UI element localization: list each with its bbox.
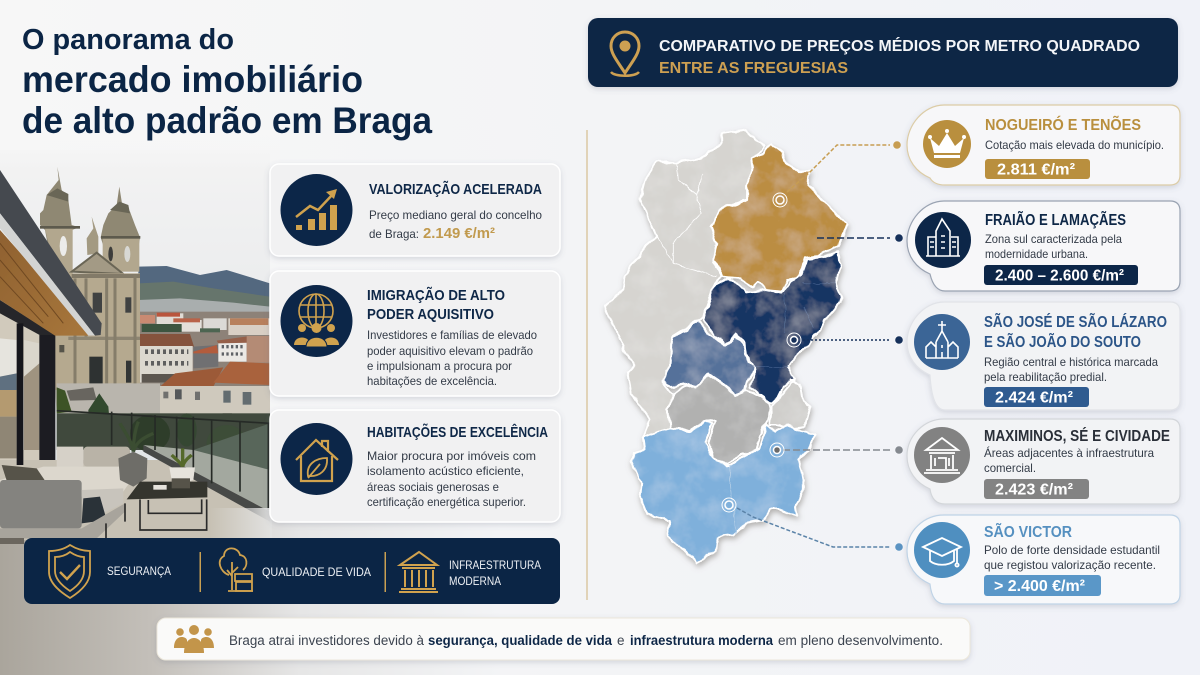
card: Nogueiró e Tenões: Cotação mais elevada do município. bbox=[985, 138, 1164, 152]
icon: shield bbox=[49, 545, 90, 598]
panel: imigração de alto poder aquisitivo: PODER AQUISITIVO bbox=[367, 306, 494, 323]
card: São José de São Lázaro e São João do Souto bbox=[895, 302, 1180, 410]
leader: Maximinos bbox=[783, 449, 890, 451]
leader: Nogueiró bbox=[787, 145, 890, 192]
card: Maximinos, Sé e Cividade: comercial. bbox=[984, 461, 1036, 475]
region: São José de São Lázaro bbox=[703, 252, 842, 403]
icon: crown bbox=[923, 120, 971, 168]
square bbox=[55, 385, 160, 413]
map markers bbox=[722, 193, 801, 512]
region: west parishes bbox=[605, 130, 765, 437]
towers bbox=[40, 167, 79, 267]
photo: Braga cathedral and terrace bbox=[0, 130, 280, 544]
icon: globe and people bbox=[280, 285, 352, 357]
card: São José de São Lázaro e São João do Souto: pela reabilitação predial. bbox=[984, 370, 1107, 384]
card: São José de São Lázaro e São João do Souto: E SÃO JOÃO DO SOUTO bbox=[984, 333, 1141, 351]
town bbox=[140, 315, 155, 323]
card: Fraião e Lamações: FRAIÃO E LAMAÇÃES bbox=[985, 211, 1126, 229]
card: São Victor bbox=[895, 515, 1180, 604]
region: Nogueiró e Tenões bbox=[711, 143, 848, 292]
roof bbox=[0, 230, 93, 336]
region: São Victor bbox=[632, 422, 815, 563]
card: São José de São Lázaro e São João do Souto: Região central e histórica marcada bbox=[984, 355, 1158, 369]
map of Braga parishes bbox=[605, 130, 848, 563]
icon: civic building bbox=[914, 427, 970, 483]
panel: benefits bar: INFRAESTRUTURA bbox=[449, 560, 541, 572]
panel: valorização acelerada bbox=[270, 164, 560, 256]
panel: habitações de excelência: certificação energética superior. bbox=[367, 495, 526, 509]
icon: graduation cap bbox=[914, 522, 970, 578]
glass wall bbox=[0, 313, 55, 460]
card: São Victor: > 2.400 €/m² bbox=[994, 578, 1085, 595]
leader: São José bbox=[803, 339, 890, 341]
panel: benefits bar: MODERNA bbox=[449, 576, 501, 588]
card: São Victor: SÃO VICTOR bbox=[984, 523, 1072, 541]
panel: habitações de excelência: isolamento acústico eficiente, bbox=[367, 464, 524, 478]
panel: imigração de alto poder aquisitivo: Investidores e famílias de elevado bbox=[367, 328, 537, 342]
icon: tree and bench bbox=[220, 548, 253, 591]
region: east small parish bbox=[770, 380, 810, 428]
panel: valorização acelerada: Preço mediano geral do concelho bbox=[369, 208, 542, 222]
panel: map heading bbox=[588, 18, 1178, 87]
card: Fraião e Lamações bbox=[895, 201, 1180, 291]
title: O panorama do bbox=[22, 24, 234, 56]
panel: valorização acelerada: de Braga: bbox=[369, 227, 419, 241]
card: São José de São Lázaro e São João do Souto: SÃO JOSÉ DE SÃO LÁZARO bbox=[984, 313, 1167, 331]
icon: temple bbox=[399, 552, 438, 592]
panel: map heading: COMPARATIVO DE PREÇOS MÉDIOS POR METRO QUADRADO bbox=[659, 36, 1140, 55]
panel: imigração de alto poder aquisitivo: e impulsionam a procura por bbox=[367, 359, 512, 373]
panel: imigração de alto poder aquisitivo: IMIGRAÇÃO DE ALTO bbox=[367, 286, 505, 304]
floor fading to the right bbox=[0, 520, 500, 675]
icon: house with leaf bbox=[280, 423, 352, 495]
panel: imigração de alto poder aquisitivo: habitações de excelência. bbox=[367, 374, 497, 388]
panel: habitações de excelência: áreas sociais generosas e bbox=[367, 480, 499, 494]
icon: location pin bbox=[611, 32, 639, 76]
panel: habitações de excelência: Maior procura por imóveis com bbox=[367, 449, 536, 463]
trees behind balcony bbox=[57, 413, 270, 450]
icon: church bbox=[914, 314, 970, 370]
card: São Victor: Polo de forte densidade estudantil bbox=[984, 543, 1160, 557]
panel: footer message: infraestrutura moderna bbox=[630, 633, 773, 648]
panel: map heading: ENTRE AS FREGUESIAS bbox=[659, 60, 848, 77]
card: Maximinos, Sé e Cividade: Áreas adjacentes à infraestrutura bbox=[984, 445, 1154, 460]
panel: habitações de excelência bbox=[270, 410, 560, 522]
coffee table bbox=[127, 482, 207, 499]
panel: imigração de alto poder aquisitivo: poder aquisitivo elevam o padrão bbox=[367, 344, 533, 358]
panel: imigração de alto poder aquisitivo bbox=[270, 271, 560, 396]
leader: São Victor bbox=[737, 508, 890, 547]
card: Maximinos, Sé e Cividade bbox=[895, 419, 1180, 504]
card: Fraião e Lamações: modernidade urbana. bbox=[985, 247, 1088, 261]
card: Nogueiró e Tenões: NOGUEIRÓ E TENÕES bbox=[985, 116, 1141, 134]
icon: people bbox=[174, 625, 214, 653]
panel: benefits bar bbox=[24, 538, 560, 604]
sofa bbox=[57, 447, 83, 468]
title: mercado imobiliário bbox=[22, 59, 363, 100]
floor bbox=[0, 460, 270, 540]
card: Fraião e Lamações: Zona sul caracterizada pela bbox=[985, 232, 1122, 246]
panel: valorização acelerada: VALORIZAÇÃO ACELERADA bbox=[369, 180, 542, 198]
panel: footer message: segurança, qualidade de vida bbox=[428, 633, 612, 648]
region: Maximinos bbox=[668, 375, 770, 463]
panel: benefits bar: SEGURANÇA bbox=[107, 566, 171, 578]
card: São Victor: que registou valorização recente. bbox=[984, 558, 1156, 572]
panel: footer message: Braga atrai investidores devido à bbox=[229, 633, 424, 648]
leader: Fraião bbox=[817, 237, 890, 239]
panel: benefits bar: QUALIDADE DE VIDA bbox=[262, 567, 371, 579]
card: Nogueiró e Tenões: 2.811 €/m² bbox=[997, 162, 1075, 178]
card: Fraião e Lamações: 2.400 – 2.600 €/m² bbox=[995, 268, 1124, 284]
panel: footer message: e bbox=[617, 633, 625, 648]
card: São José de São Lázaro e São João do Souto: 2.424 €/m² bbox=[995, 390, 1073, 406]
card: Nogueiró e Tenões bbox=[893, 105, 1180, 185]
panel: footer message bbox=[157, 618, 970, 660]
title: de alto padrão em Braga bbox=[22, 100, 432, 141]
panel: valorização acelerada: 2.149 €/m² bbox=[423, 225, 495, 242]
card: Maximinos, Sé e Cividade: MAXIMINOS, SÉ E CIVIDADE bbox=[984, 428, 1170, 445]
card: Maximinos, Sé e Cividade: 2.423 €/m² bbox=[995, 482, 1073, 498]
leader lines bbox=[737, 145, 890, 547]
icon: buildings bbox=[915, 212, 971, 268]
panel: footer message: em pleno desenvolvimento. bbox=[778, 633, 943, 648]
panel: habitações de excelência: HABITAÇÕES DE EXCELÊNCIA bbox=[367, 423, 548, 441]
icon: growth chart bbox=[280, 174, 352, 246]
title bbox=[22, 24, 432, 141]
region: Fraião bbox=[663, 320, 756, 395]
